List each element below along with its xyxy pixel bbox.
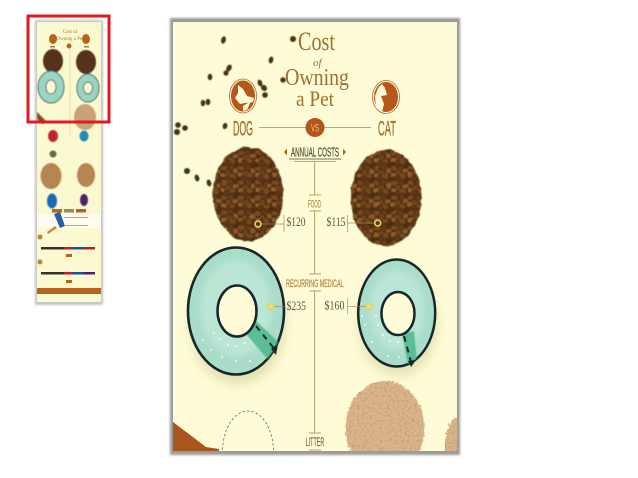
thumbnail: footer band (37, 288, 101, 294)
highlight box: red frame around thumbnail top (28, 16, 109, 122)
cat medical value: $160 (324, 298, 344, 312)
thumbnail: cat leash chart (38, 260, 95, 283)
cat litter mound (344, 380, 426, 451)
dog litter scoop (173, 422, 219, 451)
dog food kibble pile (213, 147, 283, 241)
panel: main enlarged infographic (170, 18, 473, 478)
dog medical value (267, 298, 306, 313)
panel: main enlarged infographic: RECURRING MEDICAL (286, 278, 344, 290)
cat food value (326, 214, 381, 232)
versus connector line (259, 126, 371, 128)
panel: main enlarged infographic: FOOD (308, 198, 321, 210)
panel: main enlarged infographic: LITTER (306, 435, 324, 449)
icon: dog badge (230, 79, 256, 113)
thumbnail: species icons (49, 34, 90, 48)
thumbnail: top kibble and bowls (37, 48, 99, 135)
litter section, clipped to panel (173, 380, 457, 451)
icon: cat badge (372, 80, 400, 114)
title: Owning (285, 65, 349, 91)
cat medical bowl (358, 260, 438, 376)
thumbnail: title line two: Owning a Pet (56, 37, 84, 42)
scattered kibble (174, 36, 296, 187)
dog food value (255, 214, 306, 232)
title (285, 27, 349, 111)
thumbnail: full infographic preview (35, 20, 103, 305)
cat medical value (324, 298, 372, 314)
dog medical bowl (188, 248, 286, 385)
thumbnail: lower objects (40, 130, 95, 208)
cat food kibble pile (350, 150, 422, 246)
icon: VS circle (306, 118, 324, 137)
title: Cost (298, 27, 336, 56)
thumbnail: white band with brush (37, 212, 101, 234)
thumbnail: dog leash chart (38, 234, 95, 257)
heading: annual costs: ANNUAL COSTS (291, 146, 339, 160)
heading: annual costs (284, 146, 346, 162)
central timeline (309, 162, 321, 450)
dog food value: $120 (286, 214, 306, 229)
thumbnail: title: Cost of (63, 30, 78, 35)
dog medical value: $235 (286, 298, 306, 313)
panel: main enlarged infographic: DOG (233, 118, 253, 140)
dashed dog litter outline (222, 410, 274, 450)
title: of (313, 57, 324, 69)
panel: main enlarged infographic: CAT (378, 118, 396, 140)
cat food value: $115 (326, 214, 346, 229)
title: a Pet (296, 86, 334, 111)
second litter mound (444, 416, 457, 451)
thumbnail: one-time cost tags (52, 209, 86, 212)
icon: VS circle: VS (311, 122, 319, 134)
